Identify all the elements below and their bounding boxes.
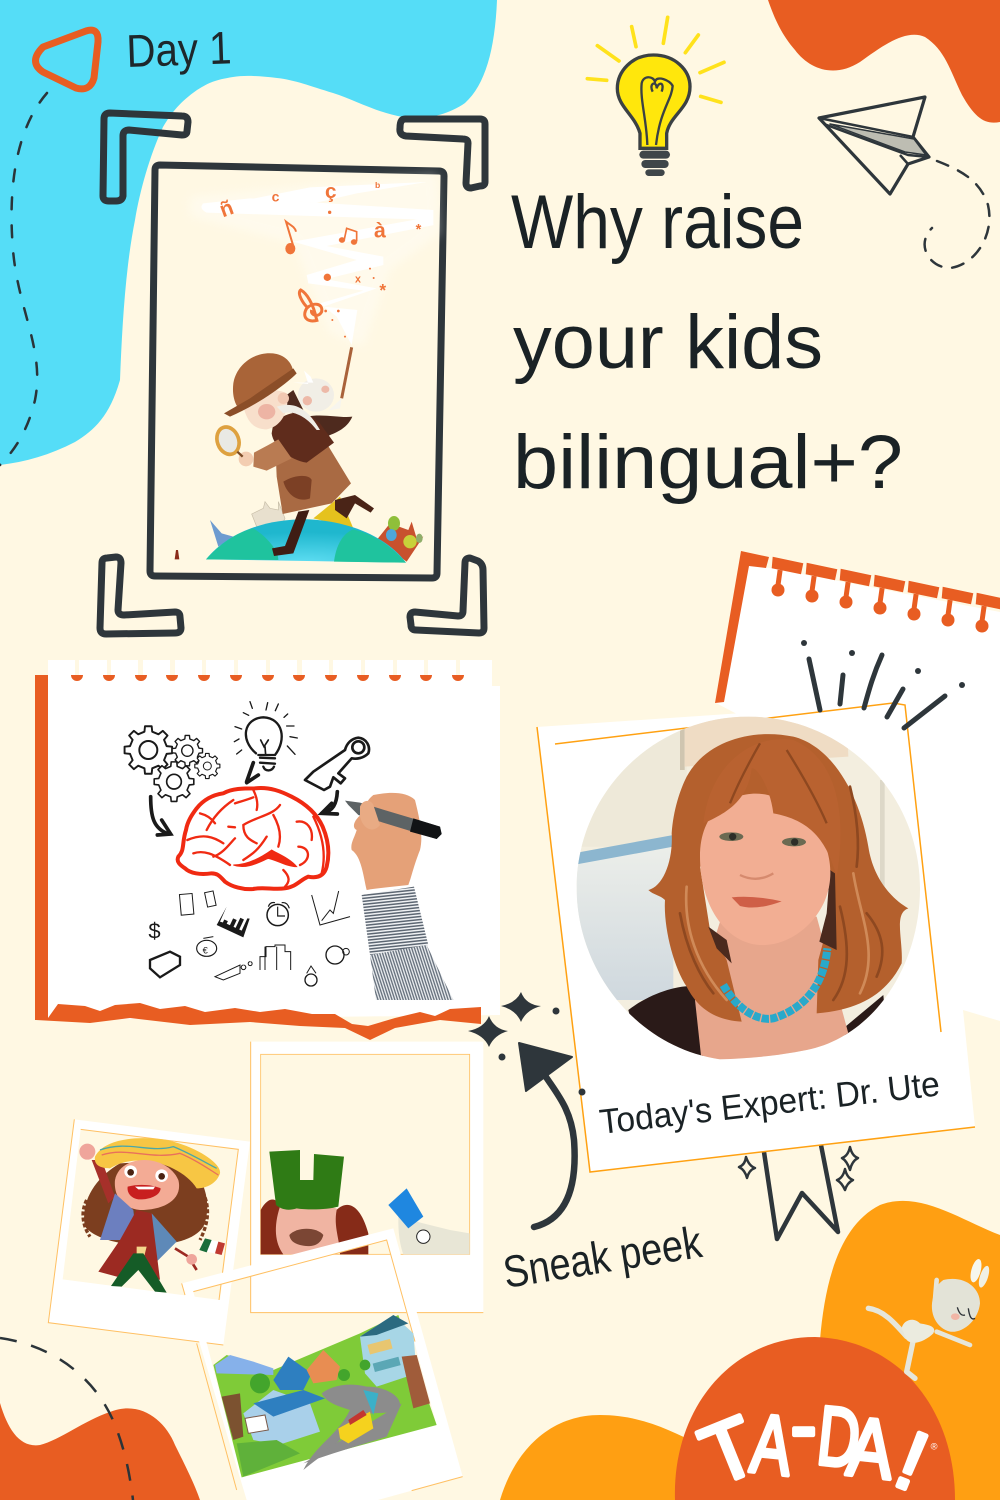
icon: paper plane [819, 97, 929, 194]
burst marks [801, 640, 965, 728]
cape [272, 413, 334, 463]
notebook panel: brain doodle [35, 660, 500, 1040]
card paper [537, 702, 975, 1172]
nose shadow [740, 873, 773, 879]
green binoculars [269, 1150, 344, 1210]
doodle drawing: € [203, 945, 209, 955]
back leg [335, 495, 374, 518]
front leg [272, 510, 309, 556]
rabbit with blue binoculars [398, 1217, 470, 1254]
bulb rays [587, 17, 724, 102]
notebook panel: right [715, 551, 1000, 1021]
rabbit limbs [868, 1280, 970, 1378]
polaroid: binoculars [251, 1042, 483, 1313]
logo: TA-DA!: A [843, 1400, 898, 1497]
polaroid: village [182, 1228, 463, 1500]
flag [175, 1248, 197, 1270]
head [243, 390, 287, 429]
orange binding [715, 551, 1000, 703]
title line 1: Why raise [511, 180, 804, 265]
girl's hair [84, 1160, 207, 1245]
coat [275, 437, 351, 514]
expert card [537, 702, 975, 1172]
logo: TA-DA!: ® [931, 1441, 938, 1451]
blob: amber bottom-centre [500, 1415, 700, 1500]
note paper [48, 660, 500, 1020]
doodle drawing [125, 702, 453, 1000]
hair [280, 390, 352, 437]
sparkles and dots [468, 992, 586, 1096]
polaroid photos [48, 1042, 483, 1500]
bulb glass [617, 55, 690, 148]
hair mass [648, 734, 908, 1022]
marker pen [345, 801, 442, 839]
logo: TA-DA!: - [791, 1379, 817, 1472]
title [511, 180, 903, 505]
picture frame with detective illustration [100, 113, 485, 634]
icon: light bulb [587, 17, 724, 176]
gears [125, 726, 220, 801]
soft glow behind swirl [190, 173, 440, 347]
eyes [719, 832, 743, 841]
orange letters: c [272, 189, 280, 205]
dashed path: bottom-left [0, 1338, 133, 1500]
magnifying glass [213, 424, 243, 457]
brain [178, 788, 328, 889]
white swirl [201, 182, 434, 345]
paper sheet [716, 566, 1000, 1021]
bulb base [639, 151, 670, 176]
rabbit head [932, 1279, 980, 1332]
arm and hand [253, 439, 292, 471]
fingers over pen [360, 801, 380, 830]
logo: TA-DA!: D [813, 1389, 865, 1486]
left orange bar [35, 675, 48, 1020]
hat [233, 353, 293, 407]
torn orange edge [36, 1003, 481, 1040]
money doodles: $ [148, 918, 161, 943]
village hills [213, 1315, 437, 1477]
logo: TA-DA! [688, 1379, 940, 1500]
lips [732, 897, 782, 908]
curved arrow to expert [519, 1043, 575, 1227]
title line 3: bilingual+? [513, 420, 903, 505]
dashed path: top-left [0, 93, 47, 465]
orange letters: ç [325, 180, 336, 203]
orange letters: b [375, 180, 380, 190]
small business doodles [179, 891, 350, 986]
houses [243, 1390, 320, 1445]
frame brackets [100, 113, 485, 634]
poncho [100, 1193, 137, 1240]
hand [351, 793, 421, 890]
blob: amber bottom-right [820, 1201, 1000, 1500]
blob: orange circle bottom-right [675, 1337, 955, 1500]
sparkles around ribbon [739, 1157, 755, 1178]
icon: orange rounded triangle [36, 30, 98, 89]
logo: TA-DA!: A [747, 1396, 796, 1493]
orange letters: à [374, 218, 386, 242]
rabbit body [902, 1320, 934, 1343]
idea bulb doodle [234, 702, 297, 770]
necklace [723, 948, 827, 1019]
raised arm [92, 1160, 115, 1203]
neck and chest [695, 917, 848, 1062]
bulb filament [641, 77, 673, 145]
child face [272, 1205, 343, 1254]
fringe [708, 795, 828, 853]
sombrero [95, 1138, 220, 1188]
portrait of Dr. Ute [573, 713, 923, 1063]
label: Day 1: Day 1 [126, 21, 232, 77]
caption: Today's Expert: Today's Expert: Dr. Ute [597, 1064, 942, 1142]
hair shadows [708, 870, 837, 963]
orange letters [216, 180, 422, 338]
striped sleeve [362, 887, 428, 955]
face [700, 794, 830, 945]
label: Sneak peek: Sneak peek [500, 1216, 706, 1298]
face [115, 1160, 179, 1210]
orange letters: x [355, 273, 361, 285]
rabbit and baton [342, 347, 352, 398]
music notes [285, 222, 357, 321]
orange letters: * [379, 280, 386, 300]
blob: blue top-left [0, 0, 497, 465]
key doodle [305, 738, 369, 790]
card orange lines [537, 703, 975, 1172]
yellow van [338, 1412, 373, 1443]
globe landmarks [210, 520, 233, 547]
dark top [628, 986, 703, 1062]
frame border [150, 165, 444, 578]
bar chart doodle [217, 907, 250, 937]
jacket and legs [98, 1210, 160, 1280]
tiny tree on the horizon [175, 550, 179, 559]
kite [363, 1390, 378, 1415]
title line 2: your kids [513, 300, 823, 385]
road [303, 1385, 400, 1470]
illustration: detective child walking on the globe [175, 173, 440, 563]
hair strands [680, 787, 882, 1000]
dashed path: plane trail [925, 161, 989, 268]
dancing rabbit mascot [868, 1258, 991, 1378]
blob: orange top-right [768, 0, 1000, 123]
portrait background [577, 718, 920, 1026]
polaroid: explorer girl [48, 1119, 250, 1345]
ribbon under the expert card [739, 1145, 858, 1239]
arrows [151, 763, 337, 835]
binding holes [71, 675, 464, 681]
globe [206, 519, 406, 563]
rabbit ears [968, 1258, 984, 1283]
orange letters: * [416, 222, 422, 238]
orange letters: ñ [216, 195, 237, 222]
blob: orange bottom-left [0, 1403, 200, 1500]
